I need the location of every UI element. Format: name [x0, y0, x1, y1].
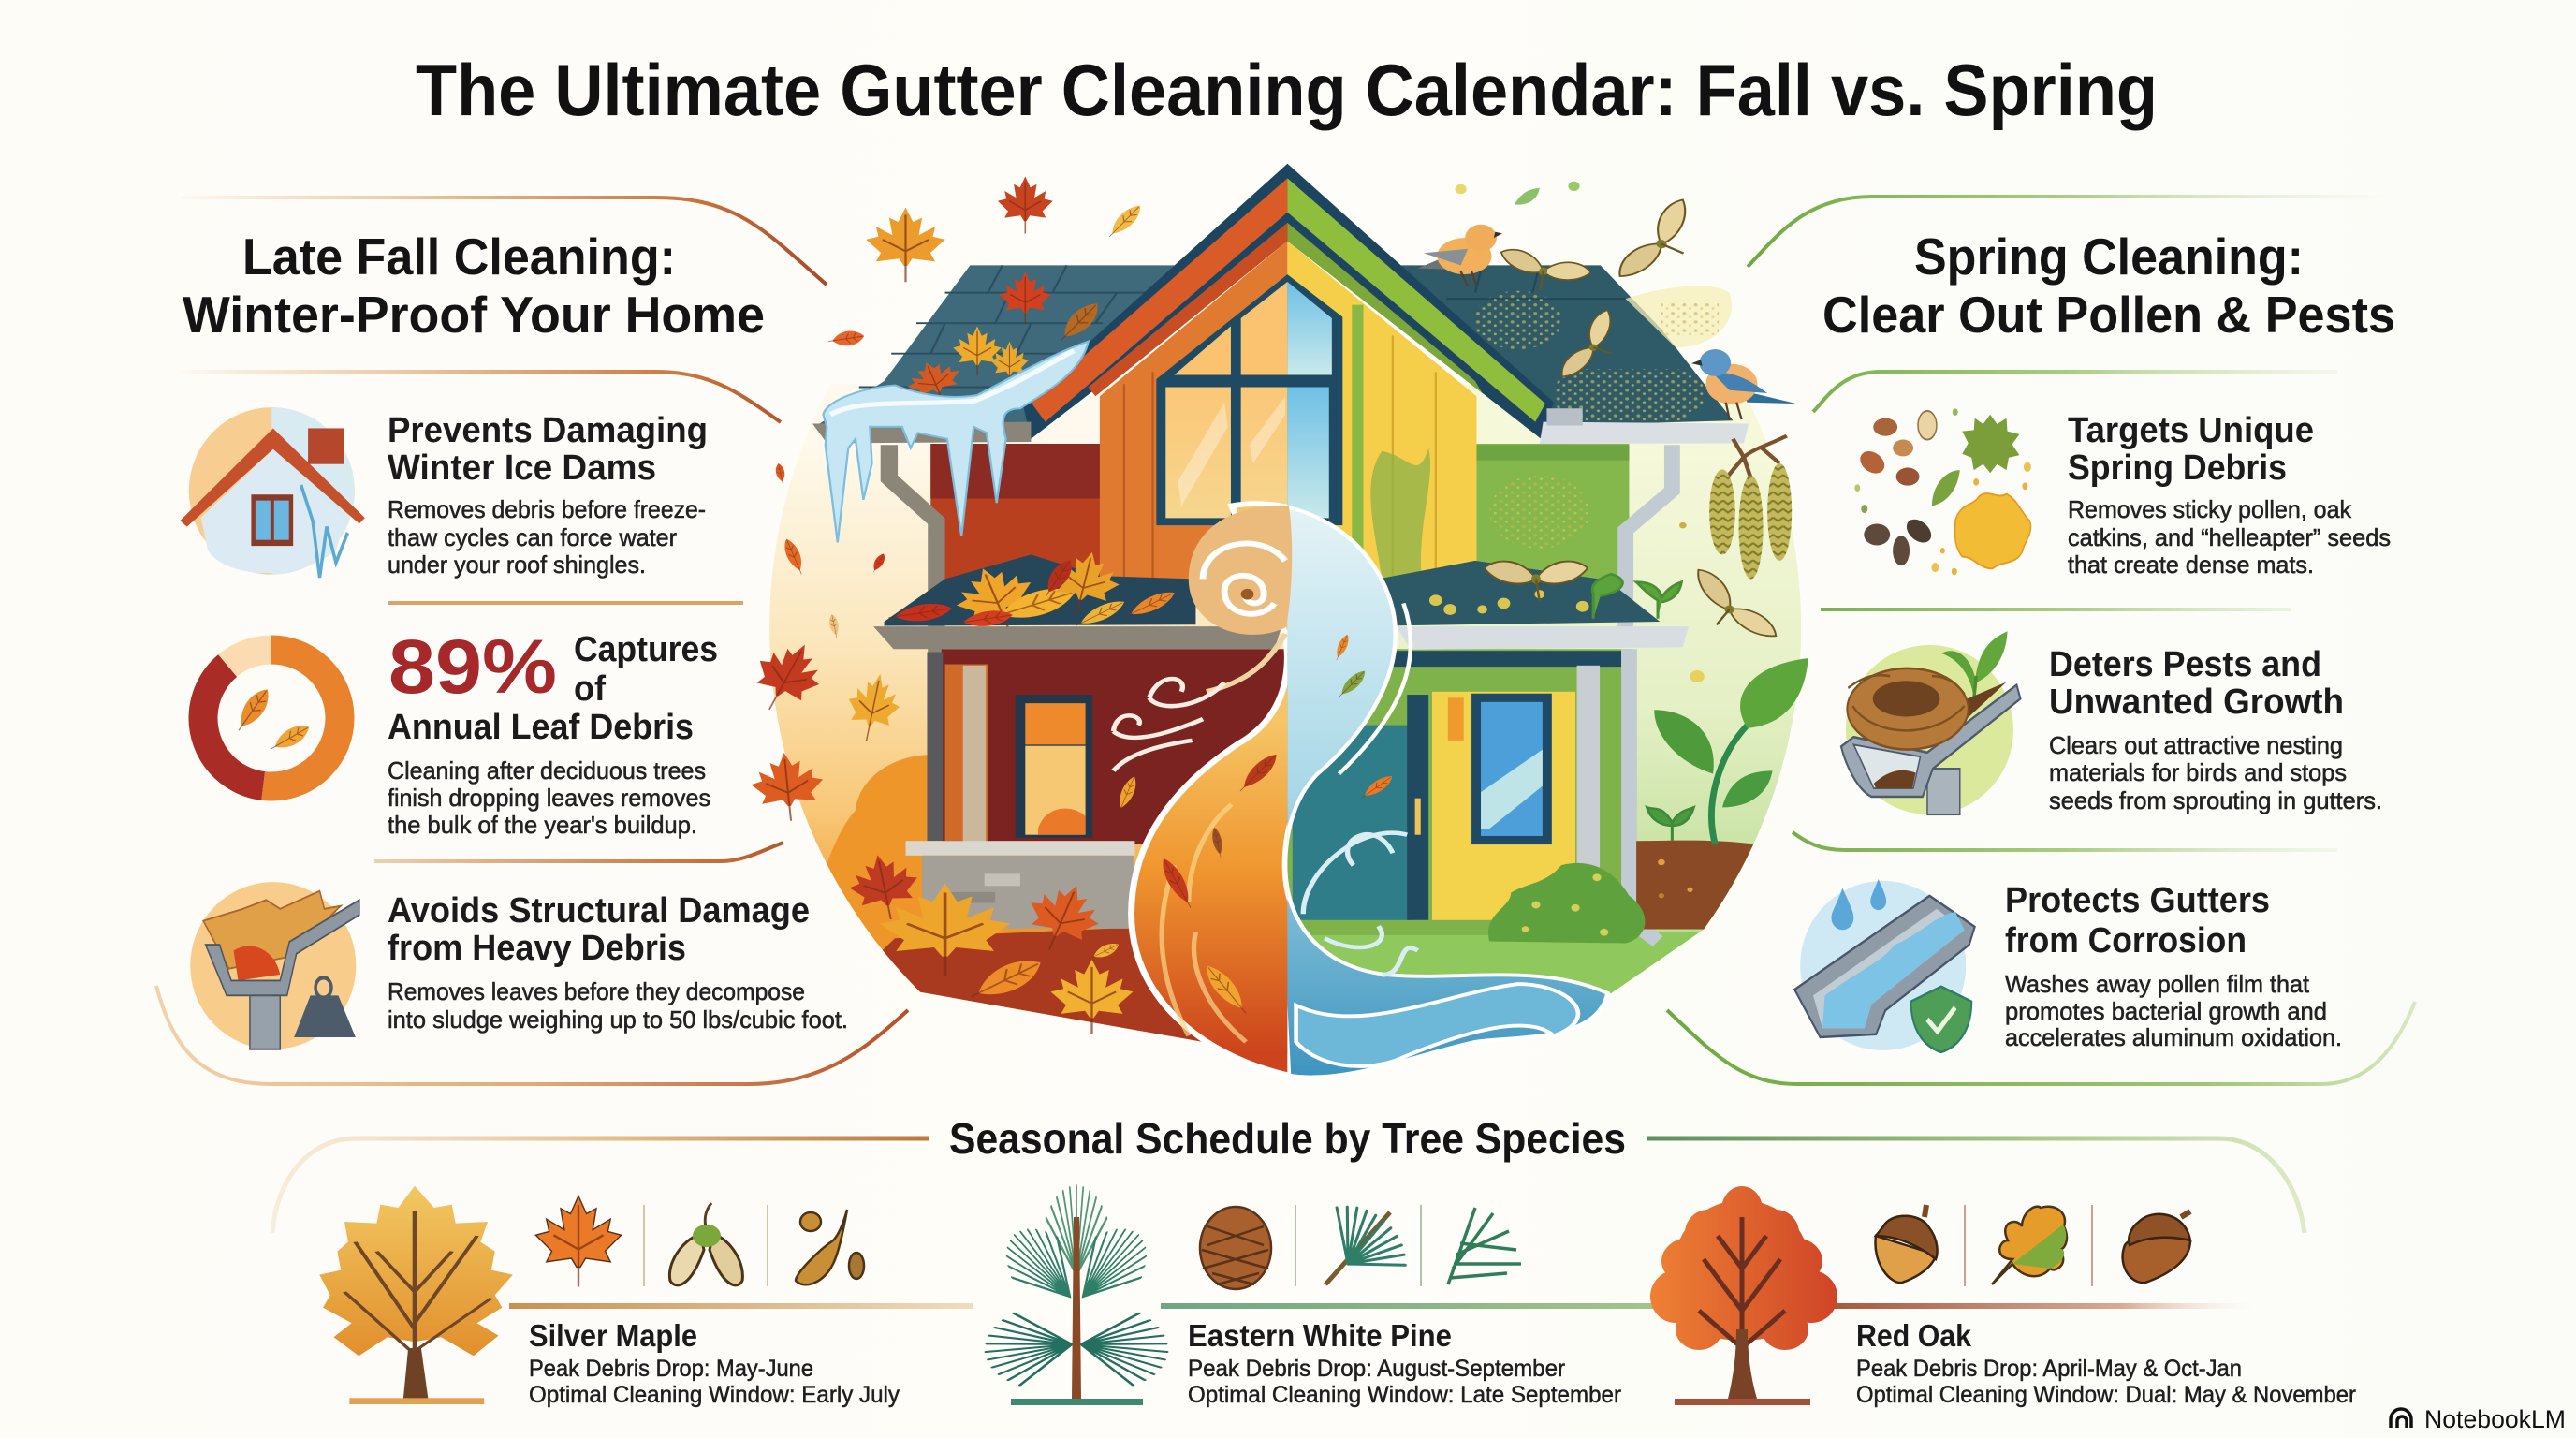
item: pests and growth: Clears out attractive nesting — [2049, 731, 2343, 759]
item: ice dams — [180, 407, 708, 579]
item: corrosion: accelerates aluminum oxidation. — [2005, 1023, 2342, 1051]
item: ice dams: under your roof shingles. — [388, 550, 646, 579]
item: structural damage — [190, 882, 848, 1049]
icon: overloaded gutter and weight — [190, 882, 359, 1049]
downspouts — [889, 445, 1672, 841]
flowing water and leaf ribbon — [1113, 504, 1607, 1077]
maple leaf — [535, 1196, 622, 1286]
item: spring debris: catkins, and “helleapter” seeds — [2068, 523, 2391, 551]
stat number: 89% — [388, 624, 557, 710]
tree card: silver maple: Optimal Cleaning Window: Early July — [529, 1382, 900, 1408]
white pine tree — [983, 1186, 1170, 1405]
pine needles — [1448, 1208, 1521, 1284]
acorn whole — [2123, 1211, 2190, 1283]
fall foreground leaf pile — [843, 850, 1134, 1034]
gable window — [1156, 274, 1342, 525]
tree card: red oak: Peak Debris Drop: April-May & Oct-Jan — [1856, 1356, 2242, 1382]
yellow door panel — [1432, 692, 1575, 920]
item: corrosion: Washes away pollen film that — [2005, 970, 2310, 998]
item: structural damage: Removes leaves before they decompose — [388, 977, 805, 1005]
icon: gutter, water and shield — [1794, 879, 1975, 1052]
orange bird — [1418, 225, 1502, 286]
item: spring debris: Spring Debris — [2068, 448, 2287, 488]
item: pests and growth: materials for birds and stops — [2049, 758, 2347, 786]
item: 89 percent stat: of — [574, 669, 606, 709]
item: corrosion: from Corrosion — [2005, 921, 2247, 961]
tree card: red oak: Optimal Cleaning Window: Dual: May & November — [1856, 1382, 2356, 1408]
leaves on fall roof and gutter — [886, 271, 1178, 638]
item: ice dams: Prevents Damaging — [388, 411, 708, 450]
second-storey side walls — [930, 444, 1629, 584]
upper gutters — [812, 408, 1749, 444]
catkins — [1709, 436, 1792, 579]
item: corrosion — [1794, 879, 2342, 1052]
heading: spring: Spring Cleaning: — [1914, 227, 2304, 286]
gable wall and window — [1100, 241, 1476, 582]
spiral — [1189, 506, 1292, 692]
item: spring debris — [1854, 408, 2391, 579]
foundation and sill — [905, 841, 1134, 929]
tree card: silver maple: Peak Debris Drop: May-June — [529, 1356, 813, 1382]
item: 89 percent stat: the bulk of the year's buildup. — [388, 811, 697, 839]
item: ice dams: thaw cycles can force water — [388, 523, 677, 551]
tree card: eastern white pine: Eastern White Pine — [1188, 1318, 1452, 1353]
icon: nest in gutter — [1841, 631, 2020, 814]
icon: seeds and pollen — [1854, 408, 2031, 575]
tree card: silver maple — [319, 1186, 900, 1408]
item: corrosion: promotes bacterial growth and — [2005, 997, 2327, 1025]
floating samaras — [1455, 182, 1780, 682]
item: 89 percent stat: Cleaning after deciduous trees — [388, 756, 706, 785]
ice dam and icicles — [823, 342, 1089, 542]
wave crest — [1296, 984, 1578, 1066]
heading: late fall: Winter-Proof Your Home — [183, 286, 765, 344]
item: spring debris: Removes sticky pollen, oak — [2068, 495, 2352, 523]
ground floor walls and door — [927, 649, 1658, 942]
item: spring debris: that create dense mats. — [2068, 550, 2314, 579]
teal door — [1293, 695, 1428, 920]
tree card: silver maple: Silver Maple — [529, 1318, 697, 1353]
heading: late fall — [183, 227, 765, 344]
item: structural damage: into sludge weighing up to 50 lbs/cubic foot. — [388, 1005, 848, 1034]
tree card: red oak: Red Oak — [1856, 1318, 1972, 1353]
seed pods — [796, 1210, 864, 1284]
tree card: eastern white pine: Peak Debris Drop: August-September — [1188, 1356, 1565, 1382]
item: structural damage: Avoids Structural Damage — [388, 891, 810, 931]
red oak tree — [1650, 1186, 1837, 1405]
item: pests and growth — [1841, 631, 2382, 814]
floating autumn leaves — [739, 176, 1146, 824]
donut chart: 89% — [203, 650, 340, 786]
section heading: Seasonal Schedule by Tree Species — [949, 1114, 1626, 1163]
title: The Ultimate Gutter Cleaning Calendar: Fall vs. Spring — [416, 49, 2158, 131]
item: ice dams: Winter Ice Dams — [388, 448, 656, 488]
section: seasonal schedule — [272, 1114, 2356, 1408]
item: structural damage: from Heavy Debris — [388, 929, 686, 968]
tree card: red oak — [1650, 1186, 2356, 1408]
heading: spring — [1822, 227, 2395, 344]
central illustration: split season house — [751, 163, 1808, 1075]
porch roofs — [873, 554, 1689, 650]
heading: spring: Clear Out Pollen & Pests — [1822, 286, 2395, 344]
item: pests and growth: Unwanted Growth — [2049, 682, 2344, 722]
item: pests and growth: seeds from sprouting in gutters. — [2049, 786, 2382, 814]
item: 89 percent stat: Captures — [574, 630, 718, 669]
silver maple tree — [319, 1186, 513, 1404]
pine branch — [1313, 1192, 1418, 1293]
seasonal backdrop circle — [769, 384, 1801, 1054]
item: pests and growth: Deters Pests and — [2049, 645, 2321, 684]
main gable roof edges — [1022, 164, 1554, 439]
samara seed — [669, 1203, 742, 1285]
right porch window — [1471, 694, 1552, 844]
left porch window — [1016, 695, 1092, 838]
tree card: eastern white pine: Optimal Cleaning Window: Late September — [1188, 1382, 1621, 1408]
pine cone — [1200, 1207, 1271, 1289]
tree card: eastern white pine — [983, 1186, 1621, 1408]
item: 89 percent stat: Annual Leaf Debris — [388, 708, 694, 747]
panel: spring cleaning — [1667, 197, 2415, 1084]
panel: late fall cleaning — [156, 198, 908, 1084]
seedling — [1647, 658, 1808, 844]
item: corrosion: Protects Gutters — [2005, 881, 2270, 920]
spring plant, soil and bush — [1488, 574, 1808, 943]
heading: late fall: Late Fall Cleaning: — [242, 227, 676, 286]
blue bird — [1691, 349, 1796, 419]
item: ice dams: Removes debris before freeze- — [388, 495, 706, 523]
acorn — [1875, 1205, 1938, 1283]
item: 89 percent stat — [203, 624, 718, 839]
item: 89 percent stat: finish dropping leaves removes — [388, 784, 710, 812]
wind gusts — [1113, 679, 1224, 770]
upper roofs — [820, 265, 1733, 427]
icon: house with ice — [180, 407, 365, 578]
watermark: NotebookLM: NotebookLM — [2424, 1405, 2566, 1433]
oak leaf — [1992, 1207, 2067, 1284]
item: spring debris: Targets Unique — [2068, 411, 2314, 450]
leaves in ribbon — [1235, 750, 1282, 796]
